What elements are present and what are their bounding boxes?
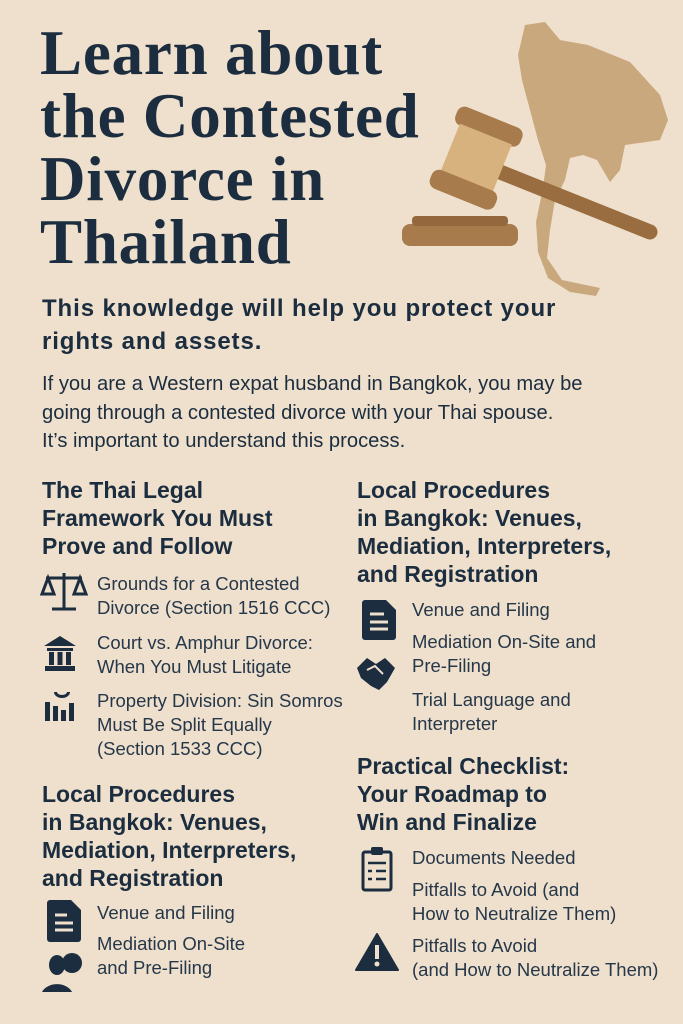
item text: Venue and Filing (97, 902, 235, 923)
title: Thailand (40, 207, 292, 277)
item text: Documents Needed (412, 847, 576, 868)
title: Learn about (40, 18, 383, 88)
title (40, 18, 420, 277)
item text: When You Must Litigate (97, 656, 291, 677)
icon: handshake (357, 658, 395, 690)
item text (412, 935, 658, 980)
icon: clipboard (362, 847, 392, 892)
item text (412, 689, 571, 734)
illustration: Thailand map and gavel (402, 22, 668, 296)
heading: The Thai Legal (42, 477, 203, 503)
title: Divorce in (40, 144, 325, 214)
heading: Local Procedures (357, 477, 550, 503)
item text: and Pre-Filing (97, 957, 212, 978)
item text: Grounds for a Contested (97, 573, 300, 594)
intro text (42, 373, 583, 452)
heading: Mediation, Interpreters, (357, 533, 611, 559)
heading: in Bangkok: Venues, (42, 809, 267, 835)
item text: (Section 1533 CCC) (97, 738, 263, 759)
subtitle: This knowledge will help you protect your (42, 295, 556, 322)
intro text: going through a contested divorce with your Thai spouse. (42, 402, 553, 424)
heading (42, 477, 272, 559)
icon: people (42, 953, 82, 992)
subtitle (42, 295, 556, 355)
heading: Framework You Must (42, 505, 272, 531)
item text (412, 631, 596, 676)
item text (97, 933, 245, 978)
item text: Court vs. Amphur Divorce: (97, 632, 313, 653)
heading (42, 781, 296, 891)
heading: and Registration (357, 561, 538, 587)
item text: Divorce (Section 1516 CCC) (97, 597, 330, 618)
heading (357, 477, 611, 587)
heading: Win and Finalize (357, 809, 537, 835)
panel: practical checklist (355, 753, 658, 980)
item text: Venue and Filing (412, 599, 550, 620)
item text: (and How to Neutralize Them) (412, 959, 658, 980)
heading: Prove and Follow (42, 533, 232, 559)
item text: Must Be Split Equally (97, 714, 272, 735)
heading: Local Procedures (42, 781, 235, 807)
item text (97, 632, 313, 677)
heading (357, 753, 569, 835)
icon: courthouse (44, 636, 76, 671)
item text (97, 690, 343, 759)
item text: Pitfalls to Avoid (and (412, 879, 579, 900)
gavel (402, 104, 650, 246)
icon: warning (355, 933, 399, 971)
subtitle: rights and assets. (42, 328, 262, 355)
item text: Mediation On-Site and (412, 631, 596, 652)
panel: local procedures right (357, 477, 611, 734)
heading: Your Roadmap to (357, 781, 547, 807)
heading: and Registration (42, 865, 223, 891)
panel: local procedures left (42, 781, 296, 992)
item text: Pre-Filing (412, 655, 491, 676)
heading: in Bangkok: Venues, (357, 505, 582, 531)
intro text: It’s important to understand this process. (42, 430, 405, 452)
item text: How to Neutralize Them) (412, 903, 616, 924)
item text: Property Division: Sin Somros (97, 690, 343, 711)
item text (412, 879, 616, 924)
heading: Practical Checklist: (357, 753, 569, 779)
icon: document (362, 600, 396, 640)
item text: Mediation On-Site (97, 933, 245, 954)
item text: Interpreter (412, 713, 497, 734)
icon: chart (45, 692, 74, 721)
icon: scales (40, 573, 88, 610)
heading: Mediation, Interpreters, (42, 837, 296, 863)
icon: document (47, 900, 81, 942)
map of Thailand (518, 22, 668, 296)
panel: legal framework (40, 477, 343, 759)
title: the Contested (40, 81, 420, 151)
item text: Trial Language and (412, 689, 571, 710)
item text (97, 573, 330, 618)
item text: Pitfalls to Avoid (412, 935, 537, 956)
intro text: If you are a Western expat husband in Bangkok, you may be (42, 373, 583, 395)
